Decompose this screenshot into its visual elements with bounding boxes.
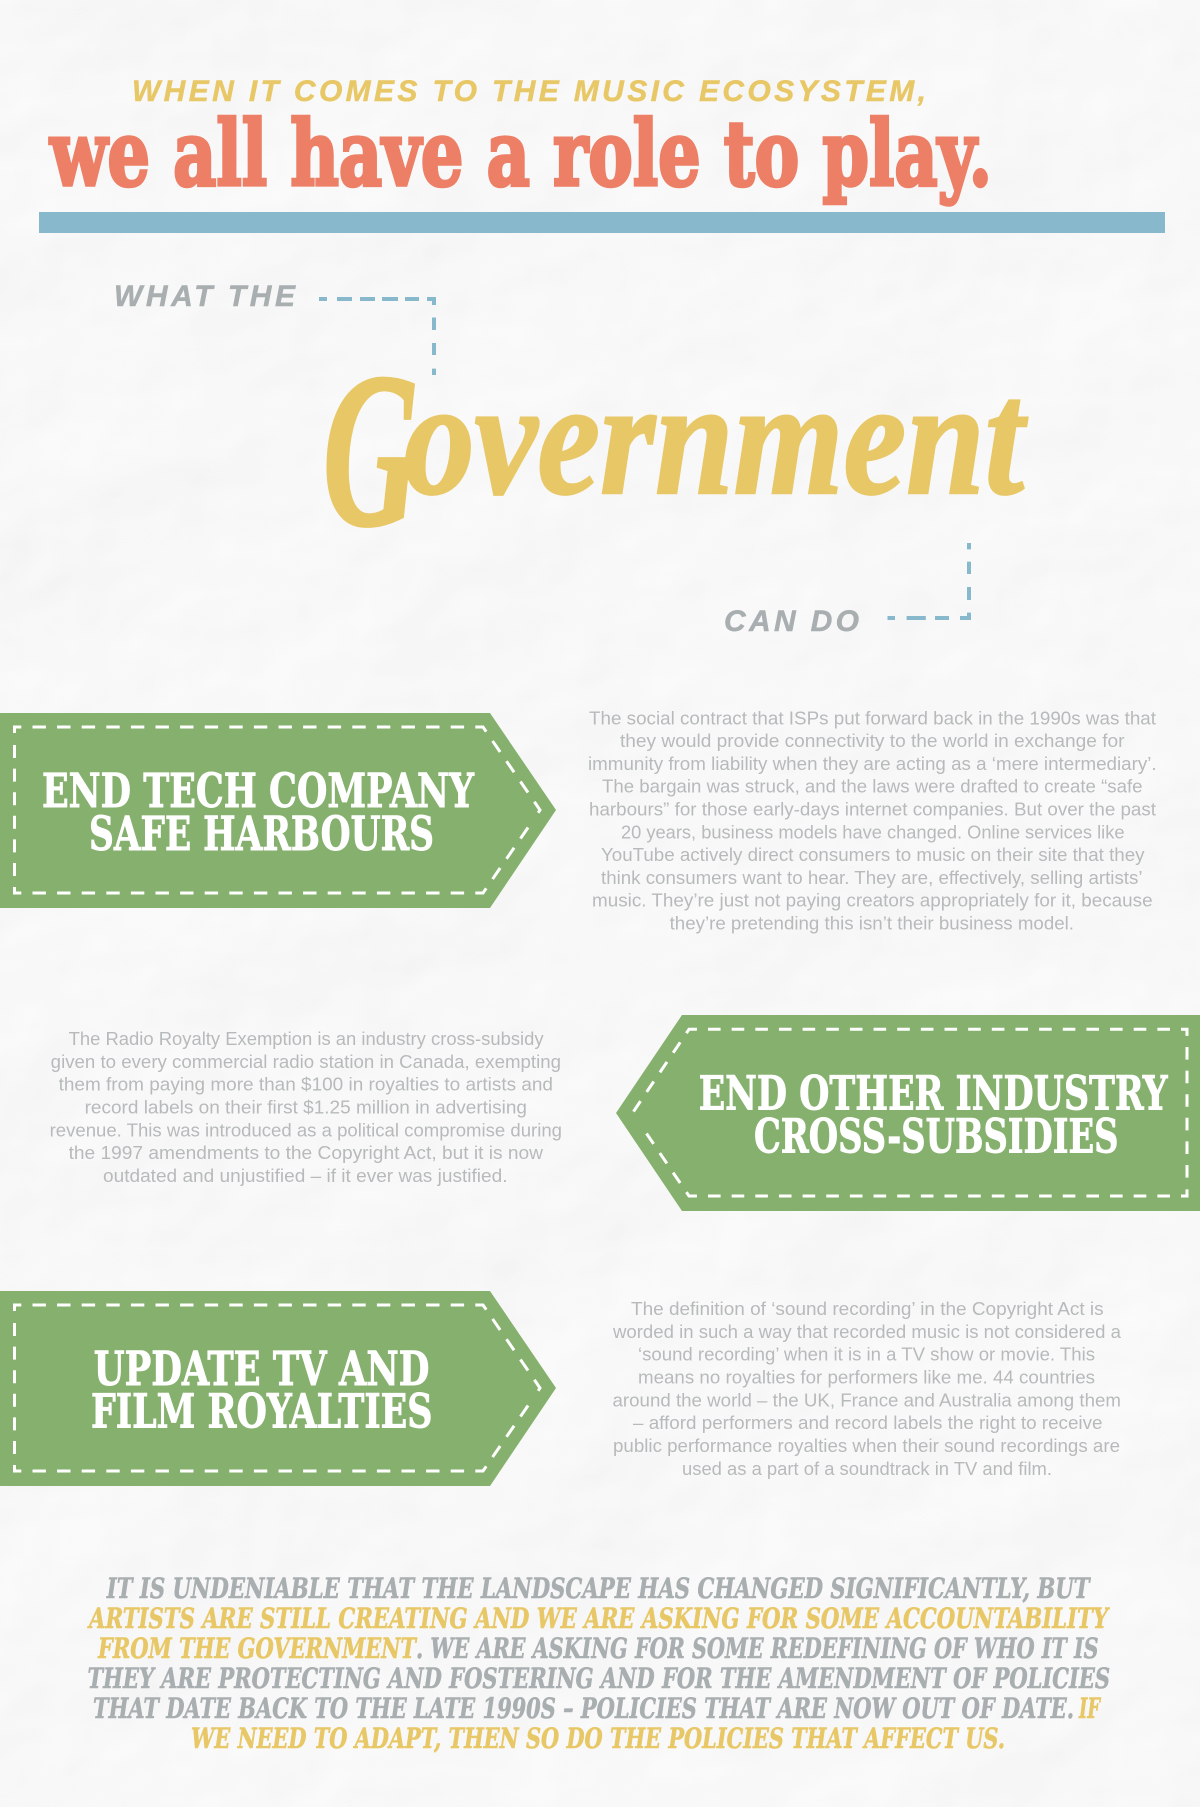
text block: radio royalty exemption: [50, 1029, 562, 1186]
text block: sound recording definition: ‘sound recording’ when it is in a TV show or movie. This: [638, 1345, 1095, 1365]
dashed connector: top: [319, 299, 434, 375]
kicker heading: WHEN IT COMES TO THE MUSIC ECOSYSTEM,: [132, 75, 926, 108]
tag: end other industry cross-subsidies: [616, 1015, 1200, 1211]
label: what the: WHAT THE: [114, 280, 296, 313]
text block: safe harbours explanation: The social contract that ISPs put forward back in the 1990s was that: [589, 708, 1156, 728]
text block: sound recording definition: used as a part of a soundtrack in TV and film.: [682, 1459, 1052, 1479]
text block: safe harbours explanation: The bargain was struck, and the laws were drafted to create “safe: [602, 777, 1142, 797]
closing statement: IF: [1078, 1692, 1101, 1725]
text block: safe harbours explanation: they would provide connectivity to the world in exchange for: [620, 731, 1124, 751]
text block: radio royalty exemption: revenue. This was introduced as a political compromise during: [50, 1120, 562, 1140]
text block: radio royalty exemption: them from paying more than $100 in royalties to artists and: [59, 1075, 553, 1095]
closing statement: [87, 1572, 1110, 1755]
text block: sound recording definition: around the world – the UK, France and Australia among them: [612, 1390, 1121, 1410]
text block: sound recording definition: – afford performers and record labels the right to receive: [633, 1413, 1102, 1433]
text block: radio royalty exemption: the 1997 amendments to the Copyright Act, but it is now: [69, 1143, 544, 1163]
text block: sound recording definition: worded in such a way that recorded music is not considered a: [612, 1322, 1122, 1342]
text block: safe harbours explanation: they’re pretending this isn’t their business model.: [670, 914, 1074, 934]
text block: radio royalty exemption: The Radio Royalty Exemption is an industry cross-subsidy: [69, 1029, 544, 1049]
text block: sound recording definition: public performance royalties when their sound recordings are: [613, 1436, 1120, 1456]
tag: end tech company safe harbours: [0, 713, 556, 908]
tag: end tech company safe harbours: SAFE HARBOURS: [89, 807, 434, 862]
text block: sound recording definition: The definition of ‘sound recording’ in the Copyright Act is: [631, 1299, 1104, 1319]
text block: safe harbours explanation: harbours” for those early-days internet companies. But over the past: [589, 800, 1156, 820]
text block: safe harbours explanation: 20 years, business models have changed. Online services like: [621, 822, 1124, 842]
tag: end tech company safe harbours: END TECH COMPANY: [42, 764, 474, 819]
tag: update tv and film royalties: [0, 1291, 556, 1486]
text block: safe harbours explanation: YouTube actively direct consumers to music on their site that they: [601, 845, 1144, 865]
closing statement: FROM THE GOVERNMENT: [97, 1632, 418, 1665]
tag: update tv and film royalties: FILM ROYALTIES: [91, 1385, 432, 1440]
text block: radio royalty exemption: record labels on their first $1.25 million in advertising: [85, 1098, 527, 1118]
text block: sound recording definition: means no royalties for performers like me. 44 countries: [638, 1368, 1095, 1388]
label: can do: CAN DO: [724, 605, 859, 638]
text block: sound recording definition: [612, 1299, 1122, 1479]
heading: Government: overnment: [404, 348, 1028, 529]
text block: radio royalty exemption: given to every commercial radio station in Canada, exempting: [51, 1052, 561, 1072]
heading: Government: [323, 328, 1028, 572]
tag: update tv and film royalties: UPDATE TV AND: [94, 1342, 429, 1397]
text block: safe harbours explanation: [588, 708, 1157, 934]
text block: safe harbours explanation: music. They’re just not paying creators appropriately for it, because: [592, 891, 1153, 911]
heading: Government: G: [323, 328, 419, 572]
text block: safe harbours explanation: think consumers want to hear. They are, effectively, selling artists’: [601, 868, 1142, 888]
title rule: [39, 212, 1165, 233]
text block: safe harbours explanation: immunity from liability when they are acting as a ‘mere intermediary’.: [588, 754, 1157, 774]
text block: radio royalty exemption: outdated and unjustified – if it ever was justified.: [103, 1166, 508, 1186]
dashed connector: bottom: [888, 543, 969, 618]
